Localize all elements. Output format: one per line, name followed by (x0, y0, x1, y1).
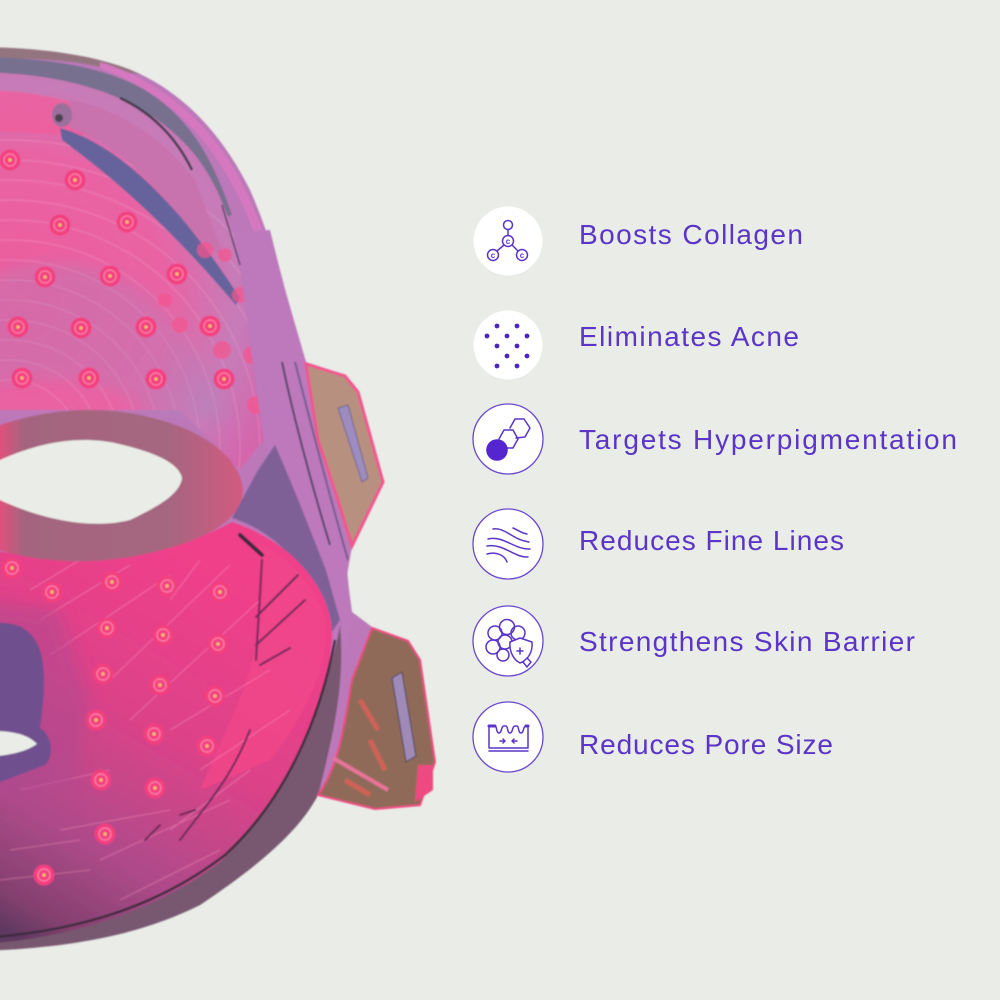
forehead upper mauve panel (70, 100, 225, 260)
lower face panel (0, 522, 332, 944)
upper ear tab (306, 364, 383, 546)
lower face dark creases (145, 535, 305, 840)
label: Strengthens Skin Barrier (579, 626, 915, 657)
top rim black line (120, 98, 192, 170)
icon: carbon molecule: c (506, 237, 511, 246)
side pink blotches (158, 242, 265, 414)
icon: acne dots (474, 310, 542, 380)
lower ear tab (318, 628, 435, 809)
benefit: Eliminates Acne (474, 310, 799, 380)
purple side panel (232, 445, 340, 632)
benefit: Targets Hyperpigmentation (473, 404, 957, 474)
icon: carbon molecule: c (491, 251, 496, 260)
mask clip button (52, 103, 72, 127)
rim dark lines (222, 205, 348, 560)
benefit: Reduces Pore Size (473, 702, 833, 772)
forehead dark groove (60, 128, 240, 305)
forehead panel (0, 72, 272, 470)
eye opening (0, 440, 182, 524)
icon: skin pores cross-section (473, 702, 543, 772)
icon: carbon molecule (474, 206, 542, 276)
label: Boosts Collagen (579, 219, 803, 250)
upper side rim (235, 230, 352, 815)
icon: pigment hexagons (473, 404, 543, 474)
lower grey rim (0, 625, 341, 951)
lavender shading across forehead (0, 263, 230, 420)
top outer rim strip (0, 47, 140, 74)
LED lights (0, 150, 234, 886)
icon: wavy lines (473, 509, 543, 579)
icon: skin cells and shield (473, 606, 543, 676)
icon: carbon molecule: c (520, 251, 525, 260)
benefit: Reduces Fine Lines (473, 509, 844, 579)
label: Reduces Fine Lines (579, 525, 844, 556)
label: Eliminates Acne (579, 321, 799, 352)
lower face ridge lines (0, 560, 290, 900)
top grey rim band (0, 57, 232, 218)
mask outer shell (0, 47, 435, 951)
LED face mask product image (0, 47, 435, 951)
forehead upper pink wash (0, 90, 135, 135)
nose side mauve area (0, 600, 90, 800)
eye gasket (0, 410, 243, 561)
nose cavity (0, 623, 51, 790)
label: Targets Hyperpigmentation (579, 424, 957, 455)
forehead concentric ridges (0, 140, 260, 468)
benefit: Strengthens Skin Barrier (473, 606, 915, 676)
benefit: Boosts Collagen (474, 206, 803, 276)
lower rim black line (0, 640, 335, 938)
outer pink rim highlight (100, 62, 305, 368)
nose opening (0, 731, 37, 758)
lower face right shade (200, 545, 326, 790)
label: Reduces Pore Size (579, 729, 833, 760)
